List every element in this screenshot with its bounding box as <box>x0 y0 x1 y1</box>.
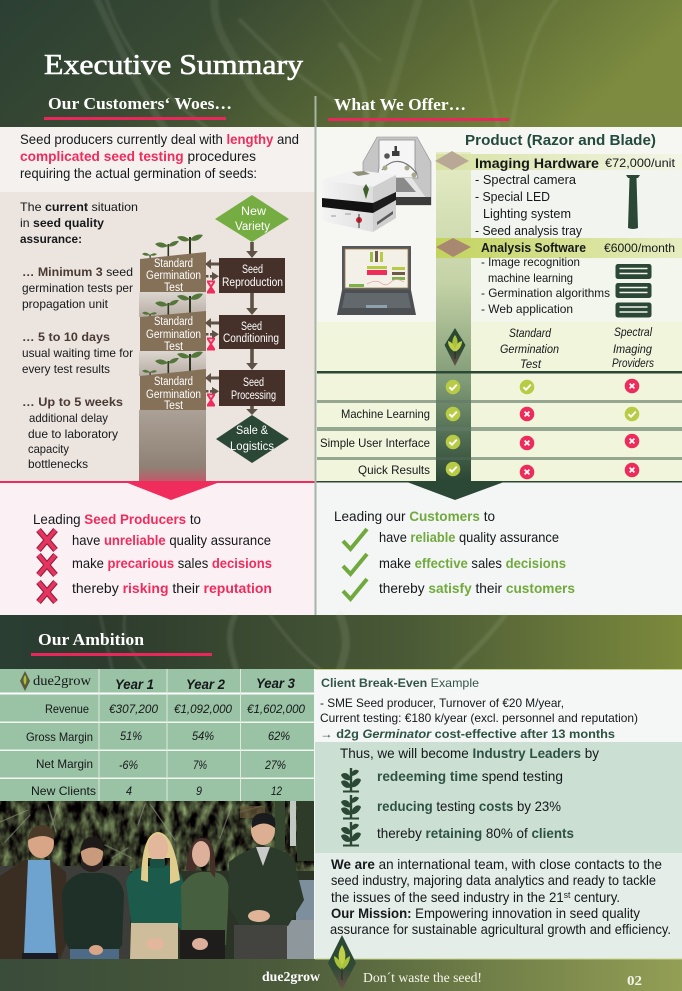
financial table <box>0 669 314 801</box>
footer <box>0 935 682 991</box>
team photo <box>0 801 314 959</box>
column heading: standard germination test: Test <box>520 357 542 371</box>
test box 2: Germination <box>146 329 201 341</box>
pain point: 5 to 10 days: every test results <box>22 362 110 376</box>
table header <box>115 675 295 692</box>
row: net margin <box>36 757 286 772</box>
row: revenue: €307,200 <box>109 702 158 716</box>
panel: team and mission: We are an international team, with close contacts to the <box>331 856 662 872</box>
sale and logistics diamond: Sale & <box>236 425 268 437</box>
panel: team and mission <box>315 853 682 959</box>
hardware feature list: - Special LED <box>475 189 550 204</box>
row: revenue: Revenue <box>45 702 89 716</box>
intro text: requiring the actual germination of seeds: <box>20 165 257 181</box>
outcome 1: have unreliable quality assurance <box>72 532 271 548</box>
software feature list: - Image recognition <box>481 255 580 269</box>
icon: razor handle <box>626 175 640 229</box>
row: net margin: 27% <box>264 758 286 772</box>
panel: team and mission: Our Mission: Empowering innovation in seed quality <box>331 905 640 921</box>
person 3 <box>126 832 184 959</box>
row: net margin: 7% <box>193 758 207 772</box>
software feature list <box>481 255 610 316</box>
outcome 2 <box>38 555 272 575</box>
sale and logistics diamond: Logistics <box>230 441 274 453</box>
cabinet front <box>322 180 373 232</box>
panel: client break-even: - SME Seed producer, Turnover of €20 M/year, <box>320 696 564 710</box>
seed conditioning box <box>219 315 285 349</box>
comparison table <box>317 325 682 479</box>
test box 3 <box>140 352 206 412</box>
brand name: due2grow <box>262 970 321 985</box>
software feature list: - Web application <box>481 302 573 316</box>
pain point: up to 5 weeks: due to laboratory <box>28 427 118 441</box>
hardware feature list: - Seed analysis tray <box>475 223 582 238</box>
flow arrows <box>205 242 258 415</box>
gradient column <box>436 152 471 481</box>
row: revenue <box>45 702 305 716</box>
person 1 <box>0 825 68 959</box>
row: gross margin: Gross Margin <box>26 730 93 744</box>
header banner <box>0 0 682 135</box>
heading: what we offer: What We Offer… <box>334 95 466 114</box>
due2grow logo: due2grow <box>33 674 92 689</box>
row: new clients: 12 <box>271 784 282 798</box>
test box 1: Standard <box>154 258 193 270</box>
outcome 3: thereby risking their reputation <box>72 580 272 596</box>
column heading: standard germination test <box>500 326 559 371</box>
ambition banner <box>0 615 682 669</box>
table header: Year 1 <box>115 676 154 692</box>
outcome heading: Leading Seed Producers to <box>33 511 201 527</box>
test box 2 <box>140 294 206 353</box>
page number: 02 <box>627 974 642 989</box>
hourglass icons <box>207 280 215 406</box>
intro text: Seed producers currently deal with lengthy and <box>20 131 299 147</box>
new variety diamond: Variety <box>235 221 270 233</box>
seed processing box <box>219 370 285 406</box>
panel: team and mission: the issues of the seed industry in the 21 <box>331 889 578 905</box>
imaging hardware row: Imaging Hardware <box>475 155 599 171</box>
status icons: due2grow <box>446 380 460 476</box>
status icons: standard test <box>520 380 534 479</box>
software feature list: - Germination algorithms <box>481 286 610 300</box>
panel: team and mission: seed industry, majoring data analytics and ready to tackle <box>331 872 656 888</box>
panel: client break-even: Current testing: €180 k/year (excl. personnel and reputation) <box>320 711 638 725</box>
heading: our ambition: Our Ambition <box>38 630 145 649</box>
person 5 <box>228 813 304 959</box>
row: revenue: €1,602,000 <box>247 702 305 716</box>
software feature list: machine learning <box>488 271 573 285</box>
hardware feature list: - Spectral camera <box>475 172 577 187</box>
seed conditioning box: Conditioning <box>223 333 279 345</box>
due2grow logo <box>20 671 92 691</box>
hardware feature list <box>475 172 582 238</box>
pain point: minimum 3 seed: … Minimum 3 seed <box>22 265 133 279</box>
outcome 1 <box>343 529 559 549</box>
test box 3: Test <box>164 400 184 412</box>
panel: team and mission: st <box>564 890 571 900</box>
pain point: up to 5 weeks: … Up to 5 weeks <box>22 395 123 409</box>
new variety diamond <box>215 195 289 242</box>
table header: Year 3 <box>256 675 295 691</box>
pain point: 5 to 10 days: usual waiting time for <box>22 346 133 360</box>
arrow: green down <box>407 482 504 500</box>
row: gross margin <box>26 729 290 744</box>
person 4 <box>180 838 229 959</box>
current situation text <box>20 200 138 246</box>
seed conditioning box: Seed <box>241 321 262 333</box>
panel: team and mission: century. <box>570 889 620 905</box>
row labels: Simple User Interface <box>320 436 430 450</box>
sale and logistics diamond <box>216 415 289 463</box>
icon: razor blades <box>616 264 652 318</box>
test box 1: Test <box>164 282 184 294</box>
cabinet top <box>322 170 396 187</box>
imaging hardware row <box>435 151 682 171</box>
panel: what we offer <box>317 127 682 481</box>
row: revenue: €1,092,000 <box>174 702 232 716</box>
intro text: complicated seed testing procedures <box>20 148 256 164</box>
column heading: spectral imaging providers: Providers <box>612 356 654 370</box>
seed reproduction box: Reproduction <box>222 277 283 289</box>
row: new clients: New Clients <box>31 784 96 798</box>
seed reproduction box <box>219 258 285 293</box>
pain point: up to 5 weeks: bottlenecks <box>28 457 88 471</box>
tagline: Don´t waste the seed! <box>363 971 482 986</box>
row labels: Quick Results <box>358 463 430 477</box>
outcome 3 <box>343 579 575 599</box>
intro text <box>20 131 299 181</box>
row: net margin: Net Margin <box>36 757 93 771</box>
current situation text: in seed quality <box>20 216 104 230</box>
status icons: spectral providers <box>625 379 639 477</box>
icon: due2grow logo <box>444 328 466 366</box>
item: reducing costs: reducing testing costs by 23% <box>377 798 561 814</box>
imaging hardware row: €72,000/unit <box>605 156 676 170</box>
pain point: 5 to 10 days <box>22 330 133 376</box>
pain point: minimum 3 seed: propagation unit <box>22 297 109 311</box>
arrow: pink down <box>125 482 220 500</box>
panel: client break-even: Client Break-Even Example <box>321 676 479 690</box>
analysis software row <box>436 238 682 258</box>
heading: our customers' woes: Our Customers‘ Woes… <box>48 94 232 113</box>
test box 3: Standard <box>154 376 193 388</box>
seed reproduction box: Seed <box>242 264 263 276</box>
pain point: up to 5 weeks: capacity <box>28 442 69 456</box>
item: retaining clients: thereby retaining 80% of clients <box>377 825 574 841</box>
item: retaining clients <box>341 822 574 846</box>
outcome 2: make effective sales decisions <box>379 555 566 571</box>
row: gross margin: 62% <box>268 729 290 743</box>
column heading: standard germination test: Germination <box>500 342 559 356</box>
item: redeeming time: redeeming time spend testing <box>377 768 563 784</box>
hardware feature list: Lighting system <box>483 206 571 221</box>
outcome heading: Leading our Customers to <box>334 508 495 524</box>
outcome 2: make precarious sales decisions <box>72 555 272 571</box>
panel: client break-even: → d2g Germinator cost-effective after 13 months <box>320 727 615 741</box>
panel: client break-even <box>315 669 682 742</box>
pain point: up to 5 weeks <box>22 395 123 471</box>
pain point: up to 5 weeks: additional delay <box>29 411 108 425</box>
row: net margin: -6% <box>119 758 138 772</box>
heading: Thus, we will become Industry Leaders by <box>340 745 599 761</box>
title: Executive Summary <box>44 50 303 81</box>
item: reducing costs <box>341 795 561 820</box>
product title: Product (Razor and Blade) <box>465 132 656 149</box>
column heading: spectral imaging providers: Imaging <box>613 342 652 356</box>
test box 1 <box>140 235 206 294</box>
test box 1: Germination <box>146 270 201 282</box>
new variety diamond: New <box>241 206 267 218</box>
column heading: spectral imaging providers: Spectral <box>614 325 652 339</box>
test box 2: Test <box>164 341 184 353</box>
row labels: Machine Learning <box>341 407 430 421</box>
outcome 2 <box>343 554 566 574</box>
pain point: 5 to 10 days: … 5 to 10 days <box>22 330 110 344</box>
panel: customers' woes <box>0 127 315 481</box>
pain point: minimum 3 seed: germination tests per <box>22 281 133 295</box>
outcome 3 <box>38 580 272 602</box>
outcome 1: have reliable quality assurance <box>379 529 559 545</box>
current situation text: assurance: <box>20 232 82 246</box>
person 2 <box>62 837 124 959</box>
outcome 1 <box>38 530 271 550</box>
row: new clients: 4 <box>126 784 132 798</box>
pain point: minimum 3 seed <box>22 265 133 311</box>
table header: Year 2 <box>186 676 225 692</box>
icon: footer logo <box>328 935 356 990</box>
row labels <box>320 407 430 477</box>
row: new clients: 9 <box>196 784 202 798</box>
item: redeeming time <box>341 768 563 792</box>
row: new clients <box>31 784 282 798</box>
analysis software row: Analysis Software <box>481 240 586 255</box>
seed processing box: Processing <box>231 390 276 402</box>
heading: our customers' woes <box>44 94 232 120</box>
column heading: spectral imaging providers <box>612 325 654 370</box>
vertical divider <box>314 96 316 615</box>
current situation text: The current situation <box>20 200 138 214</box>
heading: what we offer <box>328 95 509 121</box>
panel: negative outcome <box>0 481 315 615</box>
outcome 3: thereby satisfy their customers <box>379 580 575 596</box>
panel: industry leaders <box>315 742 682 853</box>
test box 3: Germination <box>146 389 201 401</box>
panel: positive outcome <box>315 481 682 615</box>
hardware illustration <box>322 137 431 232</box>
laptop illustration <box>337 246 416 315</box>
analysis software row: €6000/month <box>604 241 675 255</box>
seed processing box: Seed <box>243 377 264 389</box>
column heading: standard germination test: Standard <box>509 326 551 340</box>
row: gross margin: 51% <box>120 729 142 743</box>
row: gross margin: 54% <box>192 729 214 743</box>
test box 2: Standard <box>154 316 193 328</box>
germination test column <box>139 235 206 481</box>
